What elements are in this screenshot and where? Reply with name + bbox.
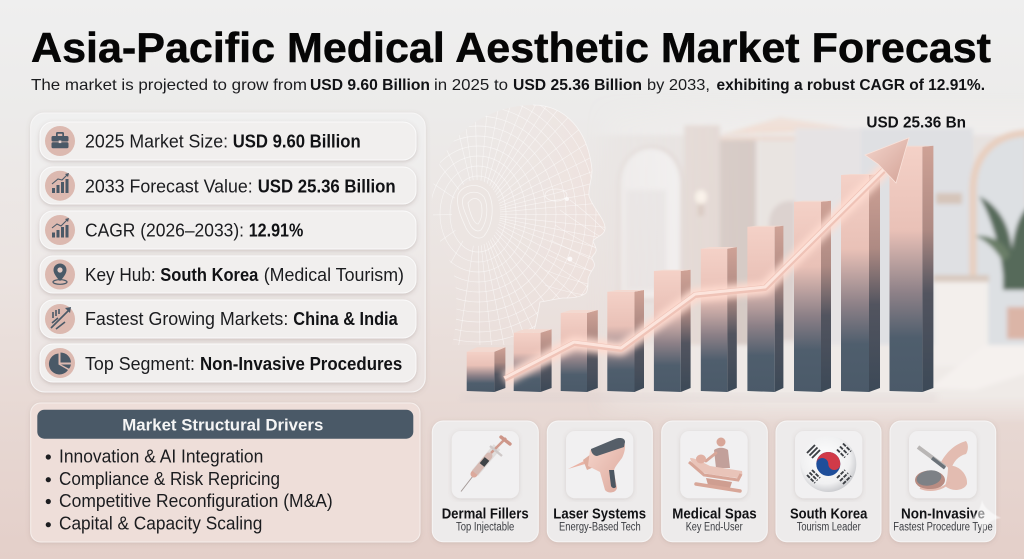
icon: Korean flag sphere bbox=[800, 436, 856, 492]
stat row: fastest growing markets bbox=[40, 300, 416, 338]
stat row: 2025 market size: USD 9.60 Billion bbox=[233, 132, 361, 152]
stat row: 2033 forecast value: 2033 Forecast Value: bbox=[85, 176, 253, 196]
drivers heading bar bbox=[37, 410, 413, 439]
subtitle bbox=[31, 77, 985, 94]
drivers bullet list bbox=[46, 446, 333, 534]
icon: spa treatment table bbox=[689, 438, 742, 491]
subtitle: in 2025 to bbox=[434, 77, 508, 94]
card: laser systems: Energy-Based Tech bbox=[559, 522, 641, 534]
stat row: top segment: Top Segment: bbox=[85, 354, 195, 374]
drivers bullet list: Compliance & Risk Repricing bbox=[59, 469, 280, 489]
stat row: key hub: Key Hub: bbox=[85, 265, 156, 285]
stat row: key hub: (Medical Tourism) bbox=[264, 265, 404, 285]
bar floor reflection bbox=[462, 393, 937, 402]
card: laser systems bbox=[547, 421, 652, 542]
card: dermal fillers bbox=[432, 421, 538, 542]
card: medical spas: Medical Spas bbox=[672, 506, 757, 522]
card: south korea: Tourism Leader bbox=[797, 522, 861, 534]
wireframe face illustration bbox=[432, 104, 606, 345]
card: laser systems: Laser Systems bbox=[553, 506, 646, 522]
stat row: 2025 market size bbox=[40, 122, 416, 160]
icon: syringe bbox=[461, 437, 510, 492]
card: non-invasive bbox=[890, 421, 996, 542]
stat row: key hub bbox=[40, 256, 416, 293]
bar chart: growth 2025 to 2033 bbox=[462, 146, 937, 402]
card: dermal fillers: Dermal Fillers bbox=[442, 506, 529, 522]
growth arrow bbox=[505, 138, 909, 379]
card: non-invasive: Fastest Procedure Type bbox=[893, 522, 993, 534]
card: south korea: South Korea bbox=[790, 506, 868, 522]
stat row: key hub: South Korea bbox=[160, 265, 259, 285]
card: dermal fillers: Top Injectable bbox=[456, 522, 514, 534]
stat row: 2033 forecast value: USD 25.36 Billion bbox=[258, 176, 396, 196]
stat row: 2033 forecast value bbox=[40, 167, 416, 204]
card: medical spas bbox=[662, 421, 767, 542]
title: Asia-Pacific Medical Aesthetic Market Forecast bbox=[31, 24, 991, 71]
chart end value label: USD 25.36 Bn bbox=[866, 114, 966, 131]
drivers bullet list: Capital & Capacity Scaling bbox=[59, 514, 262, 534]
subtitle: USD 9.60 Billion bbox=[310, 77, 430, 94]
stat row: CAGR: CAGR (2026–2033): bbox=[85, 221, 244, 241]
sparkle mark bbox=[972, 500, 1001, 532]
card: south korea bbox=[776, 421, 881, 542]
blurred clinic interior backdrop bbox=[624, 118, 1024, 412]
panel: market structural drivers bbox=[31, 403, 420, 542]
subtitle: USD 25.36 Billion bbox=[513, 77, 642, 94]
subtitle: The market is projected to grow from bbox=[31, 77, 307, 94]
stat row: fastest growing markets: Fastest Growing Markets: bbox=[85, 309, 288, 329]
stat row: 2025 market size: 2025 Market Size: bbox=[85, 132, 228, 152]
icon: laser handpiece bbox=[568, 438, 625, 492]
stat row: CAGR bbox=[40, 211, 416, 249]
stat row: top segment bbox=[40, 344, 416, 382]
icon: non-invasive device bbox=[915, 441, 968, 490]
card: non-invasive: Non-Invasive bbox=[901, 506, 985, 522]
stat row: fastest growing markets: China & India bbox=[293, 309, 399, 329]
subtitle: exhibiting a robust CAGR of 12.91%. bbox=[716, 77, 985, 94]
panel: key market stats bbox=[31, 113, 425, 392]
stat row: CAGR: 12.91% bbox=[249, 221, 303, 241]
card: medical spas: Key End-User bbox=[686, 522, 743, 534]
drivers bullet list: Competitive Reconfiguration (M&A) bbox=[59, 491, 333, 511]
drivers bullet list: Innovation & AI Integration bbox=[59, 446, 263, 466]
subtitle: by 2033, bbox=[647, 77, 710, 94]
stat row: top segment: Non-Invasive Procedures bbox=[200, 354, 402, 374]
drivers heading bar: Market Structural Drivers bbox=[122, 415, 323, 434]
